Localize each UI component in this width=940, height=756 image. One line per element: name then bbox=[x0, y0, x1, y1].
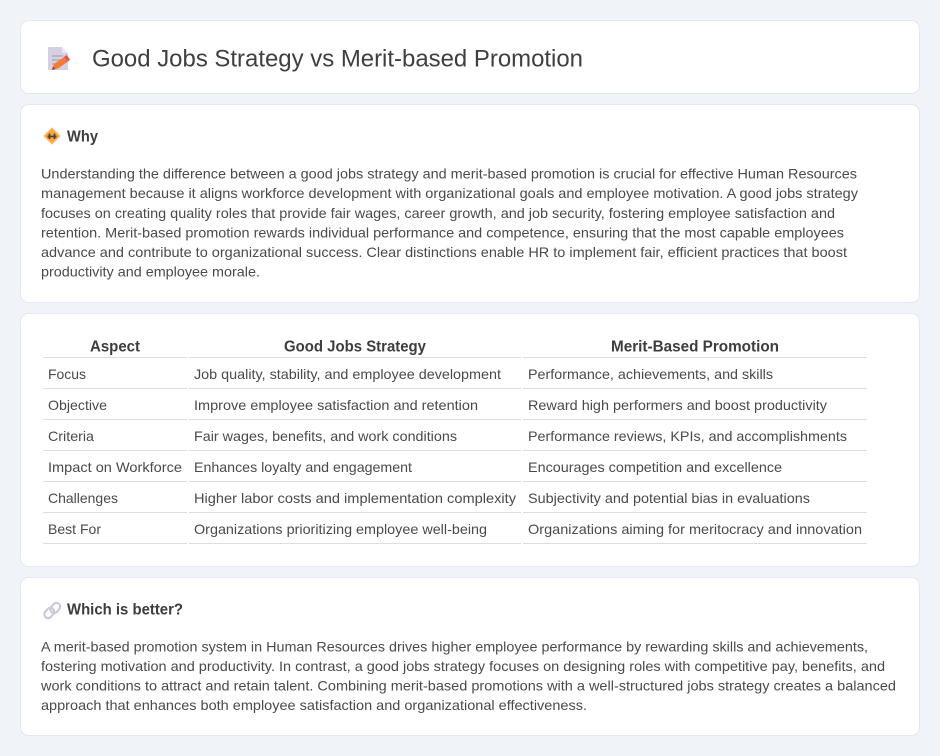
table header row: Aspect bbox=[90, 338, 141, 356]
table row: objective: Improve employee satisfaction and retention bbox=[194, 397, 478, 413]
table row: challenges: Challenges bbox=[48, 490, 118, 506]
table row: best for bbox=[48, 521, 862, 537]
table header row bbox=[90, 338, 779, 356]
table header row: Good Jobs Strategy bbox=[284, 338, 426, 356]
text block: why paragraph: retention. Merit-based promotion rewards individual performance and competence, ensuring that the most capable employees bbox=[41, 224, 844, 240]
text block: why paragraph: Understanding the difference between a good jobs strategy and merit-based promotion is crucial for effective Human Resources bbox=[41, 166, 857, 182]
icon: road sign diamond bbox=[44, 128, 60, 144]
text block: why paragraph: focuses on creating quality roles that provide fair wages, career growth, and job security, fostering employee satisfaction and bbox=[41, 205, 835, 221]
table row: objective: Objective bbox=[48, 397, 107, 413]
table row: criteria: Performance reviews, KPIs, and accomplishments bbox=[528, 428, 847, 444]
table row: focus: Focus bbox=[48, 366, 86, 382]
panel: why bbox=[20, 104, 920, 302]
text block: which is better paragraph: work conditions to attract and retain talent. Combining merit-based promotions with a well-structured jobs strategy creates a balanced bbox=[40, 678, 896, 694]
title: Good Jobs Strategy vs Merit-based Promotion bbox=[92, 46, 583, 72]
table row: best for: Best For bbox=[48, 521, 101, 537]
heading: why: Why bbox=[67, 128, 98, 146]
table row: challenges bbox=[48, 490, 810, 506]
heading: which is better: Which is better? bbox=[67, 602, 183, 618]
text block: why paragraph: advance and contribute to organizational success. Clear distinctions enable HR to implement fair, efficient practices that boost bbox=[41, 244, 847, 260]
text block: why paragraph: management because it aligns workforce development with organizational goals and employee motivation. A good jobs strategy bbox=[41, 185, 858, 201]
table row: impact on workforce bbox=[48, 459, 782, 475]
table row: objective: Reward high performers and boost productivity bbox=[528, 397, 827, 413]
table row: criteria: Criteria bbox=[48, 428, 94, 444]
panel: comparison table bbox=[20, 314, 920, 566]
table row: focus: Job quality, stability, and employee development bbox=[194, 366, 501, 382]
table row: best for: Organizations aiming for meritocracy and innovation bbox=[528, 521, 862, 537]
panel: which is better bbox=[20, 578, 920, 736]
text block: which is better paragraph: fostering motivation and productivity. In contrast, a good jobs strategy focuses on designing roles with competitive pay, benefits, and bbox=[41, 658, 885, 674]
table row: impact on workforce: Impact on Workforce bbox=[48, 459, 182, 475]
icon: chain link bbox=[43, 601, 62, 620]
text block: which is better paragraph: approach that enhances both employee satisfaction and organizational effectiveness. bbox=[41, 697, 587, 713]
table row: challenges: Subjectivity and potential bias in evaluations bbox=[528, 490, 810, 506]
table row: criteria bbox=[48, 428, 847, 444]
text block: why paragraph bbox=[41, 166, 858, 280]
table row: objective bbox=[48, 397, 827, 413]
table row: impact on workforce: Enhances loyalty and engagement bbox=[194, 459, 412, 475]
table row: focus: Performance, achievements, and skills bbox=[528, 366, 773, 382]
table row: best for: Organizations prioritizing employee well-being bbox=[194, 521, 487, 537]
table row: focus bbox=[48, 366, 773, 382]
text block: why paragraph: productivity and employee morale. bbox=[41, 264, 260, 280]
table header row: Merit-Based Promotion bbox=[611, 338, 779, 356]
icon: document with pencil bbox=[48, 47, 70, 70]
table row: challenges: Higher labor costs and implementation complexity bbox=[194, 490, 516, 506]
text block: which is better paragraph: A merit-based promotion system in Human Resources drives higher employee performance by rewarding skills and achievements, bbox=[41, 638, 868, 654]
panel: header bbox=[20, 20, 920, 94]
text block: which is better paragraph bbox=[40, 638, 896, 713]
table row: impact on workforce: Encourages competition and excellence bbox=[528, 459, 782, 475]
table row: criteria: Fair wages, benefits, and work conditions bbox=[194, 428, 457, 444]
